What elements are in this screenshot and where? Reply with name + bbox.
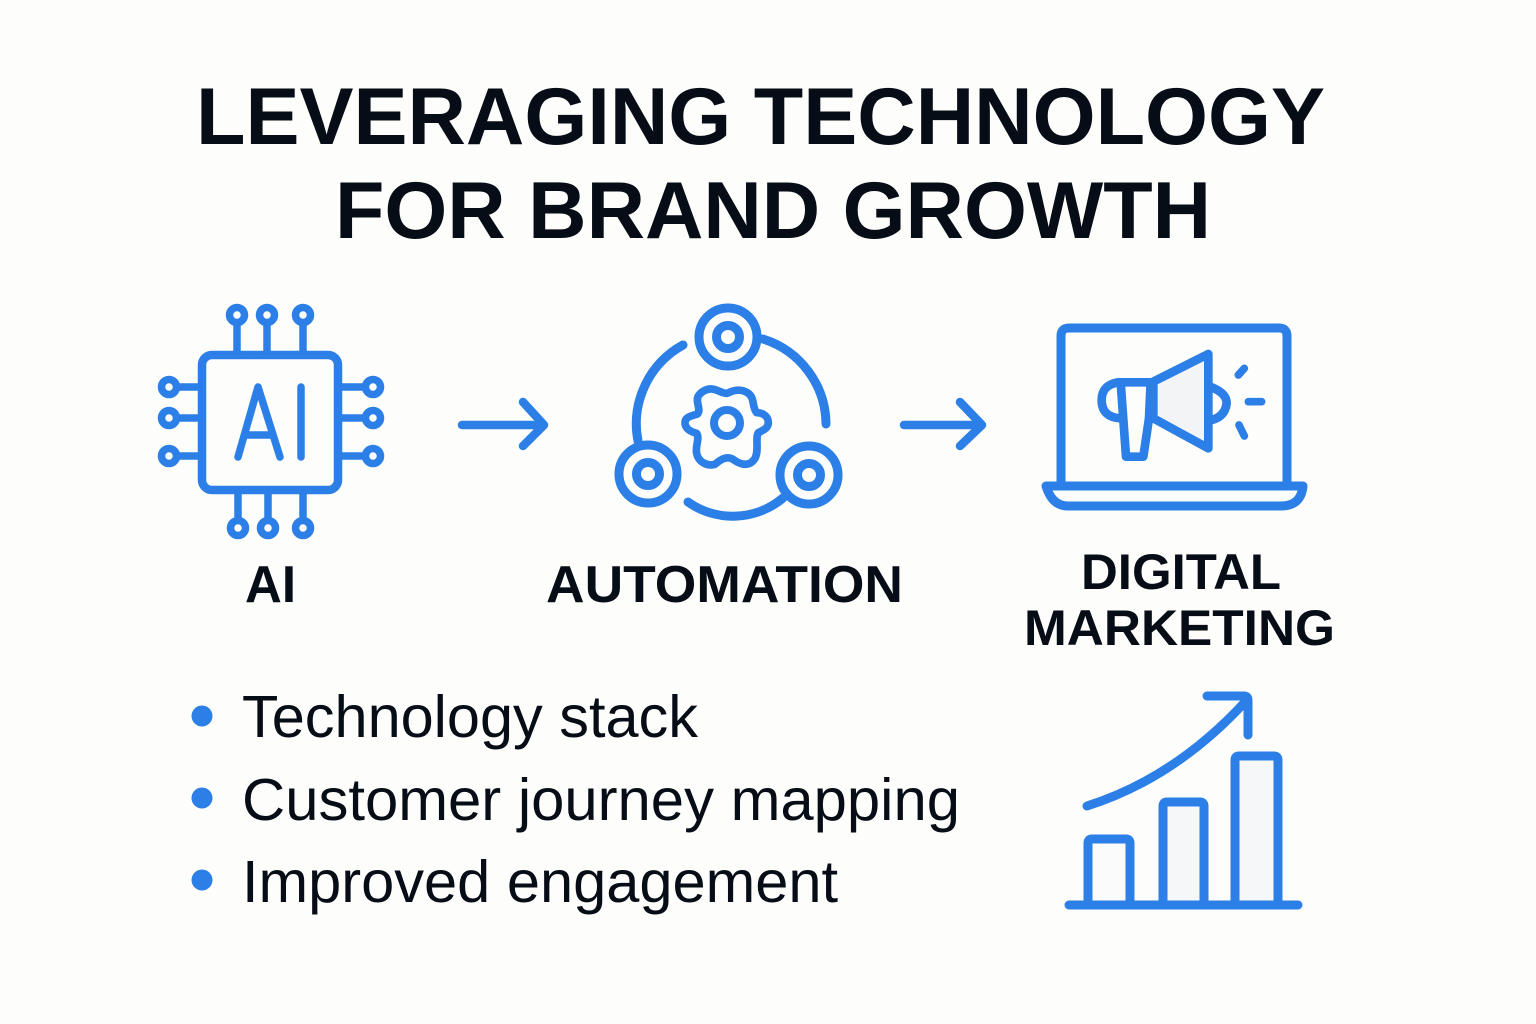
label: automation: AUTOMATION <box>546 556 903 614</box>
title: LEVERAGING TECHNOLOGY <box>196 72 1325 162</box>
label: AI: AI <box>245 556 296 614</box>
label: digital marketing: MARKETING <box>1024 600 1335 656</box>
bullet list <box>192 684 960 915</box>
icon: laptop with megaphone <box>1046 328 1303 506</box>
icon: growth bar chart <box>1069 696 1298 905</box>
bullet: technology stack: Technology stack <box>242 684 698 750</box>
icon: AI chip <box>162 308 380 536</box>
arrow: automation to digital marketing <box>904 402 982 446</box>
icon: automation cycle <box>619 308 838 516</box>
label: digital marketing <box>1024 544 1335 656</box>
title <box>196 72 1325 256</box>
bullet: improved engagement: Improved engagement <box>242 849 838 915</box>
title: FOR BRAND GROWTH <box>335 166 1211 256</box>
label: digital marketing: DIGITAL <box>1081 544 1281 600</box>
bullet: customer journey mapping: Customer journey mapping <box>242 767 960 833</box>
arrow: AI to automation <box>462 402 544 446</box>
